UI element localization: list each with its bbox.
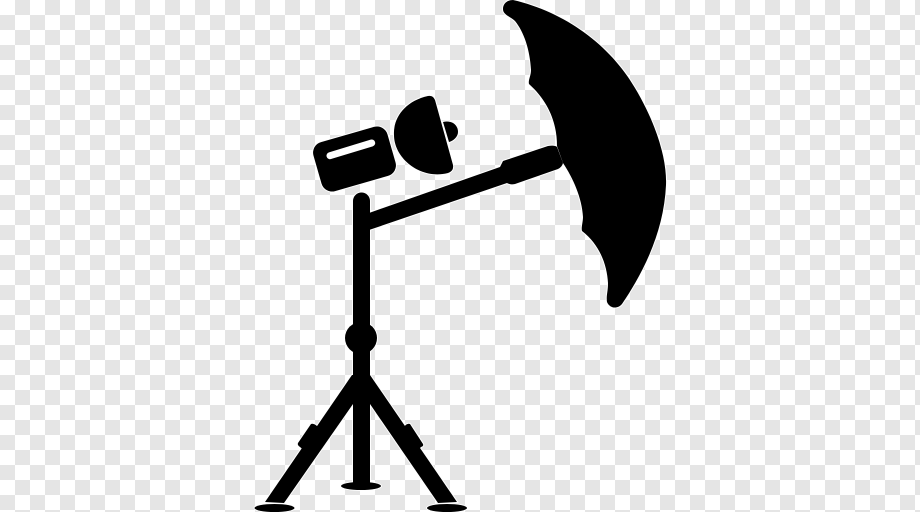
icon: light head slot: [330, 143, 372, 156]
icon: left tripod leg: [265, 375, 362, 503]
icon: left leg collar: [298, 424, 322, 452]
icon: left foot: [254, 504, 294, 512]
icon: umbrella handle: [369, 146, 563, 230]
icon: light head box: [310, 124, 399, 194]
icon: pole joint: [345, 322, 377, 354]
icon: right tripod leg: [361, 375, 457, 503]
icon: center foot: [341, 482, 381, 490]
icon: right leg collar: [400, 424, 423, 452]
icon: stand pole: [353, 192, 370, 483]
icon: right foot: [427, 504, 467, 512]
icon: umbrella canopy: [503, 0, 666, 308]
icon: rear knob: [443, 122, 458, 142]
icon: studio light stand with umbrella: [254, 0, 666, 512]
icon: reflector dome: [394, 96, 453, 174]
